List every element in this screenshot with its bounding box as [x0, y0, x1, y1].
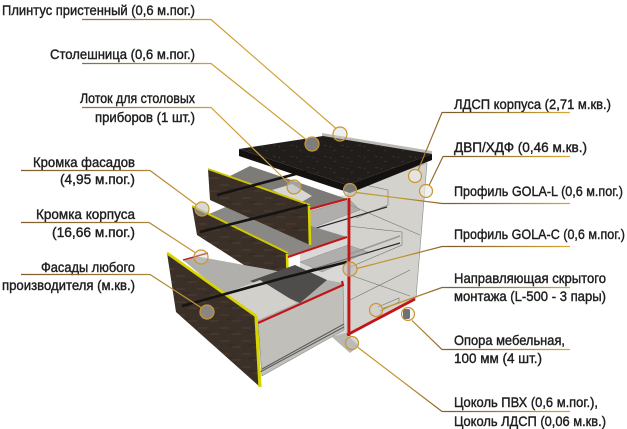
callout: cutlery tray: приборов (1 шт.)	[95, 109, 195, 125]
cabinet illustration	[167, 133, 432, 387]
callout: carcass chipboard: ЛДСП корпуса (2,71 м.кв.)	[454, 96, 611, 112]
wall plinth	[322, 133, 432, 156]
callout: GOLA-L profile	[344, 183, 623, 204]
callout: plinth panel: Цоколь ПВХ (0,6 м.пог.),	[454, 394, 598, 410]
callout: fibreboard: ДВП/ХДФ (0,46 м.кв.)	[454, 139, 587, 155]
callout: facade edging: Кромка фасадов	[33, 154, 135, 170]
callout: wall plinth: Плинтус пристенный (0,6 м.пог.)	[2, 2, 195, 18]
furniture foot	[403, 309, 410, 319]
callout: facades: Фасады любого	[41, 259, 135, 275]
callout: fibreboard	[420, 139, 587, 198]
hidden drawer slide outlines	[283, 183, 420, 311]
top drawer front	[208, 169, 347, 245]
callout: furniture support: Опора мебельная,	[454, 332, 565, 348]
callout: cutlery tray: Лоток для столовых	[80, 90, 195, 106]
countertop	[239, 136, 432, 193]
tray in top drawer	[272, 184, 312, 203]
callout: hidden slide: монтажа (L-500 - 3 пары)	[454, 288, 606, 304]
callout: plinth panel	[346, 336, 606, 429]
top drawer interior	[226, 166, 347, 209]
callout: carcass edging: (16,66 м.пог.)	[52, 224, 135, 240]
bottom drawer front	[167, 253, 347, 387]
red cabinet edging	[183, 198, 415, 336]
middle drawer front	[192, 205, 347, 293]
callout: hidden slide	[370, 270, 606, 316]
callout: facade edging	[21, 154, 209, 216]
callout: facades: производителя (м.кв.)	[2, 277, 135, 293]
callout: hidden slide: Направляющая скрытого	[454, 270, 606, 286]
middle drawer interior	[209, 203, 347, 257]
callout: wall plinth	[2, 2, 347, 141]
callout: carcass edging	[21, 206, 208, 264]
callout: furniture support	[402, 308, 570, 366]
callout: facades	[2, 259, 214, 319]
cabinet front void	[300, 195, 349, 340]
callout: plinth panel: Цоколь ЛДСП (0,06 м.кв.)	[454, 413, 606, 429]
callout: countertop	[50, 46, 319, 151]
callout: countertop: Столешница (0,6 м.пог.)	[50, 46, 195, 62]
callout: GOLA-C profile	[343, 226, 625, 276]
bottom drawer interior	[183, 256, 344, 376]
cabinet side panel	[347, 163, 427, 335]
callout: carcass edging: Кромка корпуса	[36, 206, 135, 222]
callout: carcass chipboard	[408, 96, 611, 182]
callout: cutlery tray	[80, 90, 301, 194]
plinth	[332, 333, 359, 353]
callout: facade edging: (4,95 м.пог.)	[60, 171, 135, 187]
callout: furniture support: 100 мм (4 шт.)	[454, 350, 542, 366]
